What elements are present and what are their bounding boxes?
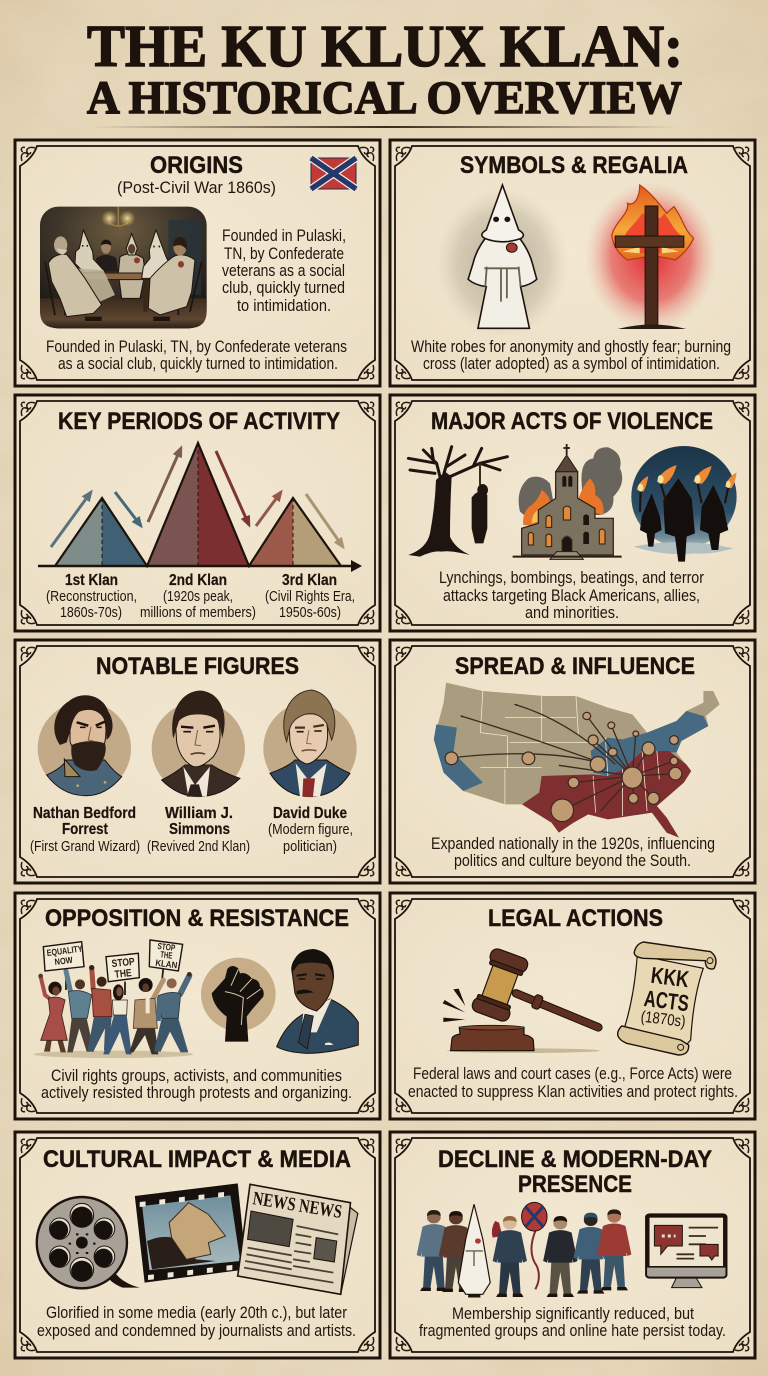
title: THE KU KLUX KLAN: (87, 13, 683, 79)
illustration: bare tree silhouette (408, 447, 507, 557)
text: spread caption (431, 834, 715, 870)
heading: cultural impact: CULTURAL IMPACT & MEDIA (43, 1146, 351, 1173)
panel: cultural impact and media (15, 1132, 380, 1358)
figure: man in red shirt (87, 965, 112, 1052)
illustration: protest march (33, 940, 193, 1058)
icon: film strip (135, 1183, 247, 1283)
label: 1st klan: (Reconstruction, (46, 588, 137, 605)
text: scroll lettering: ACTS (643, 985, 690, 1016)
label: forrest: Nathan Bedford (33, 805, 136, 822)
heading: notable figures: NOTABLE FIGURES (96, 653, 299, 680)
panel: notable figures (15, 640, 380, 883)
heading: decline (438, 1146, 712, 1198)
sign: stop the (111, 956, 135, 981)
map: united states spread (434, 683, 720, 838)
illustration: night riders with torches (631, 446, 737, 562)
text: beside illustration: to intimidation. (237, 296, 331, 315)
icon: raised fist (201, 958, 276, 1042)
illustration: founders at table (40, 207, 207, 328)
label: duke (268, 805, 353, 855)
text: violence caption: Lynchings, bombings, beatings, and terror (439, 568, 704, 587)
panel: major acts of violence (390, 395, 755, 631)
label: forrest (30, 805, 140, 855)
label: 1st klan (46, 572, 137, 621)
sign: stop the: STOP (111, 956, 135, 970)
text: cultural caption: exposed and condemned by journalists and artists. (37, 1321, 356, 1340)
chart: three klan peaks (38, 443, 362, 572)
text: origins caption: Founded in Pulaski, TN, by Confederate veterans (46, 337, 347, 356)
text: origins caption: as a social club, quickly turned to intimidation. (58, 354, 338, 373)
text: decline caption (419, 1304, 726, 1340)
label: duke: David Duke (273, 805, 347, 822)
label: simmons: Simmons (169, 821, 230, 838)
label: 3rd klan: 1950s-60s) (279, 604, 341, 621)
heading: decline: PRESENCE (518, 1171, 632, 1198)
icon: gavel (443, 947, 600, 1053)
icon: burning cross (585, 182, 717, 332)
heading: violence: MAJOR ACTS OF VIOLENCE (431, 408, 713, 435)
text: cultural caption (37, 1303, 356, 1340)
label: 2nd klan: 2nd Klan (169, 572, 227, 589)
text: beside illustration (222, 226, 346, 315)
text: scroll lettering: KKK (650, 962, 691, 992)
heading: key periods: KEY PERIODS OF ACTIVITY (58, 408, 340, 435)
panel: origins (15, 140, 380, 386)
sign: stop the klan: STOP (157, 941, 176, 953)
heading: symbols: SYMBOLS & REGALIA (460, 152, 688, 179)
sign: equality now: EQUALITY (46, 944, 83, 958)
figure: man in blue sweater (154, 972, 192, 1052)
text: spread caption: politics and culture beyond the South. (454, 851, 691, 870)
label: forrest: Forrest (62, 821, 109, 838)
sign: stop the klan (155, 941, 178, 970)
title (87, 13, 683, 124)
sign: equality now: NOW (54, 955, 74, 967)
figure: woman in red dress (38, 974, 67, 1052)
text: violence caption: attacks targeting Black Americans, allies, (443, 586, 700, 605)
text: scroll lettering (640, 962, 691, 1031)
sign: stop the: THE (114, 967, 132, 981)
panel: legal actions (390, 893, 755, 1119)
text: origins caption (46, 337, 347, 373)
heading: origins: ORIGINS (150, 152, 243, 179)
arrows: rises and falls (51, 448, 343, 547)
text: beside illustration: TN, by Confederate (224, 244, 344, 263)
illustration: burning church (513, 444, 622, 559)
figure: person in tan jacket (129, 978, 163, 1054)
text: violence caption (439, 568, 704, 622)
icon: monitor with chat bubbles (646, 1214, 726, 1288)
label: 2nd klan: millions of members) (140, 604, 256, 621)
portrait: nathan bedford forrest (38, 695, 131, 796)
text: beside illustration: Founded in Pulaski, (222, 226, 346, 245)
icon: white robe and hood (436, 185, 569, 338)
text: opposition caption: Civil rights groups, activists, and communities (51, 1066, 342, 1085)
heading: decline: DECLINE & MODERN-DAY (438, 1146, 712, 1173)
title: A HISTORICAL OVERVIEW (87, 72, 682, 124)
text: spread caption: Expanded nationally in the 1920s, influencing (431, 834, 715, 853)
sign: stop the klan: THE (160, 949, 173, 961)
text: beside illustration: club, quickly turned (222, 278, 345, 297)
sign: equality now (46, 944, 83, 967)
portrait: william j simmons (152, 691, 245, 797)
label: 3rd klan: (Civil Rights Era, (265, 588, 355, 605)
label: duke: politician) (283, 838, 337, 855)
text: opposition caption: actively resisted through protests and organizing. (41, 1083, 352, 1102)
sign: stop the klan: KLAN (155, 958, 178, 970)
heading: opposition: OPPOSITION & RESISTANCE (45, 905, 349, 932)
label: 2nd klan: (1920s peak, (163, 588, 233, 605)
icon: film reel (37, 1197, 140, 1288)
label: simmons (147, 805, 250, 855)
label: 2nd klan (140, 572, 256, 621)
portrait: martin luther king jr (277, 949, 358, 1053)
text: opposition caption (41, 1066, 352, 1102)
label: simmons: (Revived 2nd Klan) (147, 838, 250, 855)
label: forrest: (First Grand Wizard) (30, 838, 140, 855)
panel: key periods of activity (15, 395, 380, 631)
figure: woman with jeans (103, 984, 132, 1054)
label: simmons: William J. (165, 805, 233, 822)
text: legal caption (408, 1064, 738, 1101)
icon: newspaper (238, 1184, 358, 1294)
label: 1st klan: 1st Klan (65, 572, 118, 589)
heading: spread: SPREAD & INFLUENCE (455, 653, 695, 680)
label: duke: (Modern figure, (268, 821, 353, 838)
panel: symbols and regalia (390, 140, 755, 386)
label: 3rd klan (265, 572, 355, 621)
text: symbols caption (411, 337, 731, 373)
figure: man in blue shirt (66, 971, 94, 1052)
icon: confederate flag (311, 158, 356, 189)
text: beside illustration: veterans as a social (222, 261, 345, 280)
subheading: post-civil war: (Post-Civil War 1860s) (117, 178, 276, 197)
label: 1st klan: 1860s-70s) (60, 604, 122, 621)
text: cultural caption: Glorified in some media (early 20th c.), but later (46, 1303, 347, 1322)
icon: scroll (618, 942, 716, 1055)
panel: opposition and resistance (15, 893, 380, 1119)
panel: decline and modern-day presence (390, 1132, 755, 1358)
text: violence caption: and minorities. (525, 603, 619, 622)
text: scroll lettering: (1870s) (640, 1009, 686, 1031)
portrait: david duke (263, 690, 357, 797)
heading: legal actions: LEGAL ACTIONS (488, 905, 663, 932)
illustration: modern extremist groups (417, 1202, 631, 1297)
label: 3rd klan: 3rd Klan (282, 572, 337, 589)
text: decline caption: Membership significantly reduced, but (452, 1304, 694, 1323)
panel: spread and influence (390, 640, 755, 883)
icon: newspaper: NEWS NEWS (251, 1188, 343, 1223)
